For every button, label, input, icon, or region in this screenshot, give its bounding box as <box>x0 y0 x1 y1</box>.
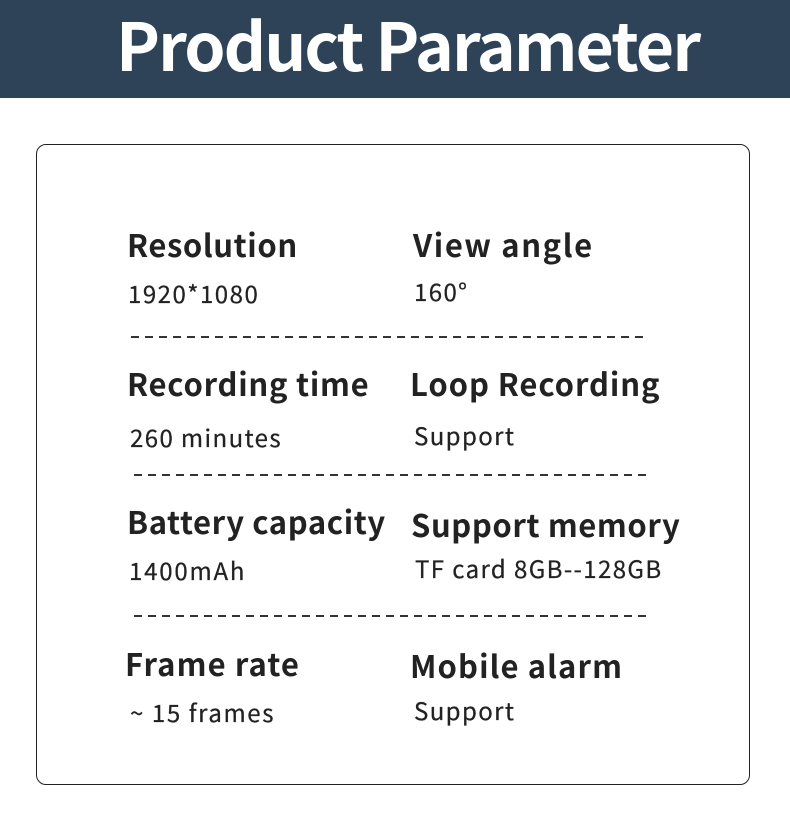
value: view angle: 160° <box>414 273 468 308</box>
heading: Loop Recording: Loop Recording <box>410 360 660 405</box>
value: resolution: 1920*1080 <box>128 275 259 310</box>
heading: Mobile alarm: Mobile alarm <box>410 642 623 687</box>
value: support memory: TF card 8GB--128GB <box>415 550 663 585</box>
value: recording time: 260 minutes <box>130 419 282 454</box>
heading: Frame rate: Frame rate <box>125 640 300 685</box>
title banner <box>0 0 790 98</box>
heading: Battery capacity: Battery capacity <box>127 498 386 543</box>
heading: View angle: View angle <box>413 221 594 266</box>
panel: parameters <box>36 144 750 785</box>
value: frame rate: ~ 15 frames <box>130 694 275 729</box>
heading: Support memory: Support memory <box>411 501 680 546</box>
value: battery capacity: 1400mAh <box>129 552 246 587</box>
heading: Recording time: Recording time <box>127 360 369 405</box>
value: loop recording: Support <box>414 417 515 452</box>
heading: Resolution: Resolution <box>127 221 298 266</box>
value: mobile alarm: Support <box>414 692 515 727</box>
